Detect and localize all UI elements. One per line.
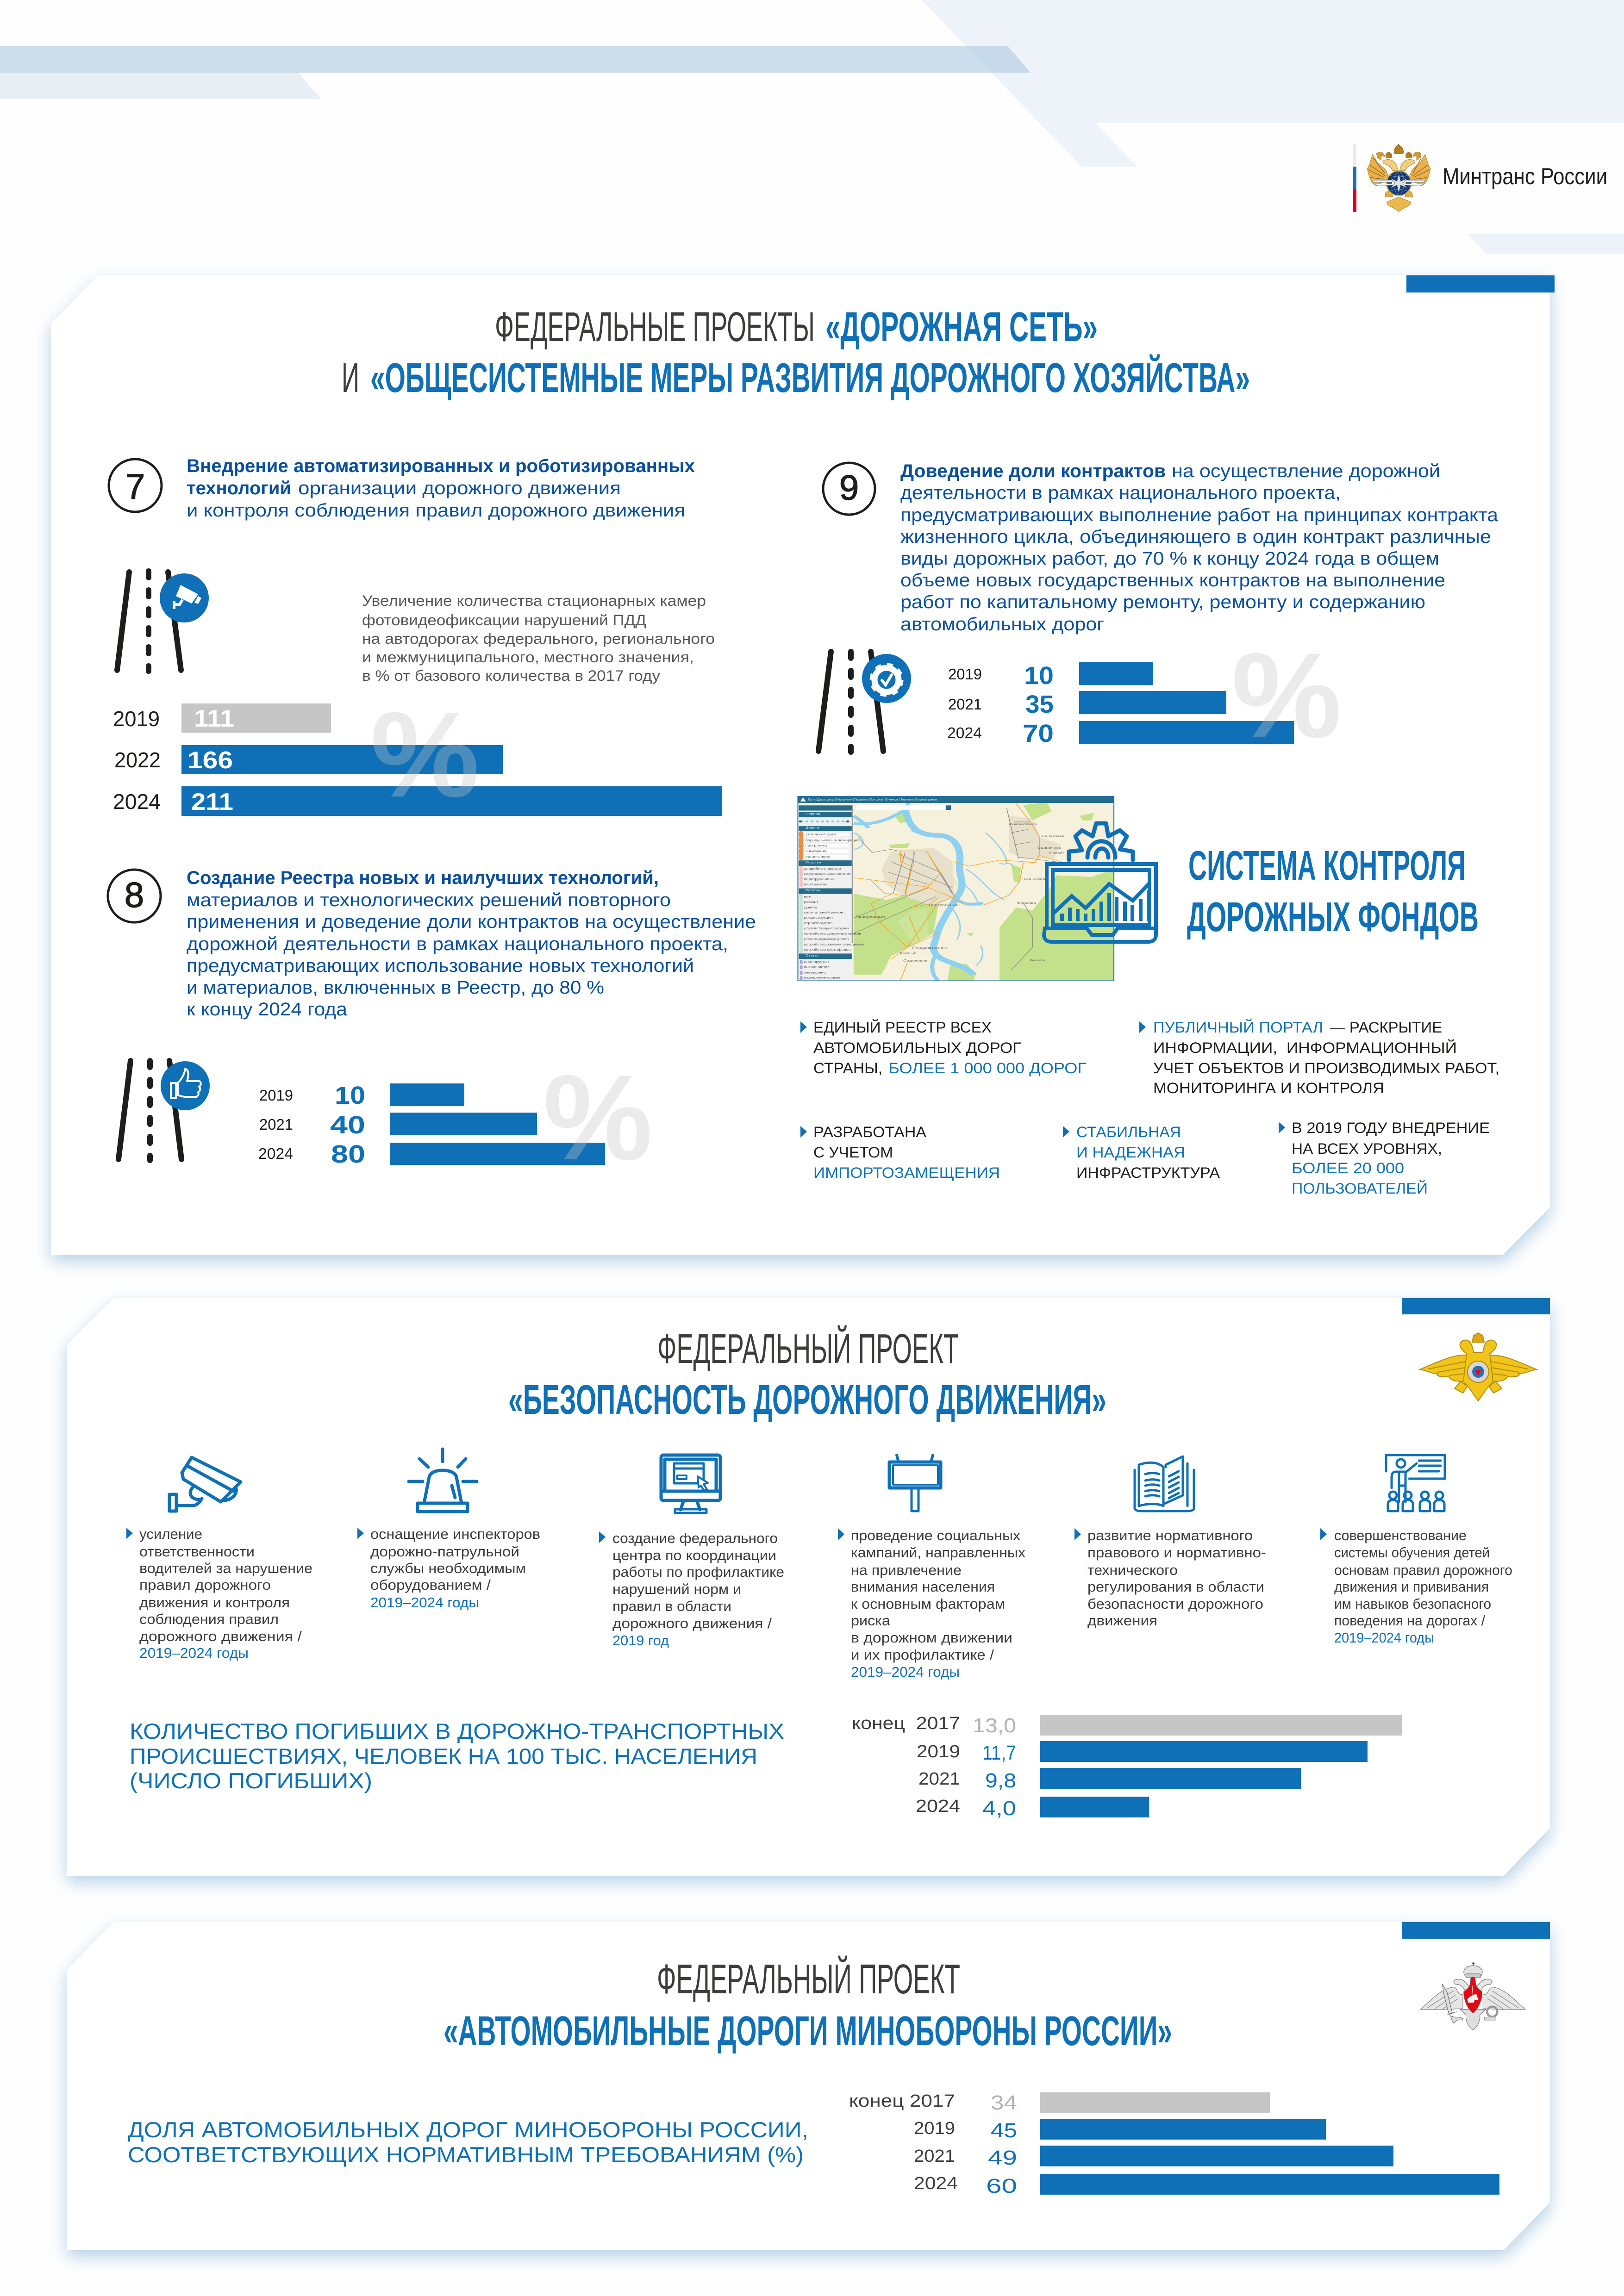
- text block: item 8: дорожной деятельности в рамках национального проекта,: [187, 934, 728, 954]
- text block: item 9: предусматривающих выполнение работ на принципах контракта: [900, 505, 1499, 525]
- item: социальные кампании: 2019–2024 годы: [851, 1664, 960, 1680]
- heading: минобороны: [443, 1955, 1172, 2054]
- number badge 9: [823, 463, 875, 515]
- bullet: импортозамещение: [800, 1124, 1000, 1181]
- item: обучение детей: основам правил дорожного: [1334, 1562, 1512, 1578]
- bar chart: item 8: 2019: [259, 1087, 293, 1104]
- map screenshot: все: [804, 895, 811, 898]
- bullet: 20 000 пользователей: БОЛЕЕ 20 000: [1292, 1160, 1404, 1176]
- item: оснащение инспекторов: оснащение инспекторов: [370, 1526, 540, 1542]
- item: усиление ответственности: усиление: [139, 1526, 202, 1542]
- map screenshot: аварийно-опасные: [804, 867, 841, 870]
- text block: item 9: работ по капитальному ремонту, ремонту и содержанию: [900, 592, 1425, 612]
- heading: дорожная сеть: ФЕДЕРАЛЬНЫЕ ПРОЕКТЫ: [495, 304, 815, 350]
- map screenshot: барнаульская агломерация: [806, 839, 860, 842]
- heading: минобороны: «АВТОМОБИЛЬНЫЕ ДОРОГИ МИНОБОРОНЫ РОССИИ»: [443, 2008, 1172, 2054]
- item: обучение детей: совершенствование: [1334, 1527, 1467, 1543]
- bullet: 20 000 пользователей: [1279, 1120, 1490, 1197]
- panel: дорожная сеть: [51, 275, 1555, 1261]
- item: обучение детей: поведения на дорогах /: [1334, 1612, 1485, 1629]
- map screenshot: строительство: [804, 921, 833, 925]
- item: усиление ответственности: движения и контроля: [139, 1594, 290, 1611]
- item: социальные кампании: внимания населения: [851, 1579, 995, 1595]
- bullet: импортозамещение: РАЗРАБОТАНА: [813, 1124, 927, 1140]
- bar chart: item 9: 2021: [948, 696, 982, 713]
- item: оснащение инспекторов: 2019–2024 годы: [370, 1594, 479, 1611]
- number badge 9: 9: [839, 468, 859, 508]
- panel: автомобильные дороги минобороны: [67, 1922, 1550, 2257]
- map screenshot: 2 выбрано: [806, 850, 826, 853]
- icon: siren: [409, 1449, 477, 1512]
- item: социальные кампании: риска: [851, 1612, 891, 1629]
- icon: road with gear: [818, 652, 911, 752]
- item: нормативное регулирование: развитие нормативного: [1087, 1527, 1253, 1543]
- item: оснащение инспекторов: оборудованием /: [370, 1577, 491, 1593]
- bar chart: доля дорог: 45: [991, 2119, 1017, 2142]
- bullet: 20 000 пользователей: НА ВСЕХ УРОВНЯХ,: [1292, 1140, 1442, 1157]
- item: обучение детей: движения и прививания: [1334, 1579, 1489, 1595]
- bullet: импортозамещение: ИМПОРТОЗАМЕЩЕНИЯ: [813, 1164, 1000, 1181]
- text block: camera description: [362, 592, 715, 684]
- map screenshot: Южный: [900, 951, 917, 955]
- map screenshot: планируется: [804, 960, 829, 964]
- item: усиление ответственности: соблюдения правил: [139, 1611, 279, 1627]
- bar chart: погибшие: конец 2017: [852, 1714, 960, 1733]
- bar chart: item 9: 10: [1024, 662, 1054, 690]
- item: федеральный центр: нарушений норм и: [612, 1581, 741, 1597]
- map screenshot: алтайский край: [806, 833, 836, 836]
- panel: безопасность дорожного движения: [67, 1298, 1550, 1882]
- text block: item 9: на осуществление дорожной: [1172, 461, 1440, 481]
- bar chart: погибшие: 11,7: [982, 1742, 1016, 1764]
- bullet: единый реестр: [800, 1019, 1087, 1076]
- item: усиление ответственности: дорожного движения /: [139, 1628, 302, 1644]
- bullet: публичный портал: ПУБЛИЧНЫЙ ПОРТАЛ: [1153, 1019, 1323, 1036]
- map screenshot: организация: [806, 855, 830, 859]
- item: усиление ответственности: водителей за нарушение: [139, 1560, 312, 1576]
- text block: доля дорог: СООТВЕТСТВУЮЩИХ НОРМАТИВНЫМ ТРЕБОВАНИЯМ (%): [128, 2142, 804, 2167]
- bar chart: погибшие: 2021: [918, 1769, 960, 1789]
- item: обучение детей: системы обучения детей: [1334, 1544, 1490, 1561]
- item: оснащение инспекторов: дорожно-патрульной: [370, 1543, 519, 1560]
- bar chart: погибшие: 9,8: [985, 1769, 1016, 1792]
- bar chart: item 9: %: [1231, 628, 1342, 763]
- bar chart: item 9: 35: [1025, 691, 1054, 718]
- bar chart: доля дорог: 2024: [914, 2174, 958, 2193]
- icon: monitor: [661, 1455, 720, 1513]
- bullet: 20 000 пользователей: В 2019 ГОДУ ВНЕДРЕНИЕ: [1292, 1120, 1490, 1136]
- bullet: 20 000 пользователей: ПОЛЬЗОВАТЕЛЕЙ: [1292, 1180, 1428, 1197]
- number badge 7: [109, 459, 162, 512]
- text block: item 7: [187, 456, 695, 521]
- text block: количество погибших: ПРОИСШЕСТВИЯХ, ЧЕЛОВЕК НА 100 ТЫС. НАСЕЛЕНИЯ: [130, 1744, 757, 1768]
- item: социальные кампании: и их профилактике /: [851, 1647, 994, 1663]
- bar chart: доля дорог: 49: [988, 2147, 1017, 2169]
- bar chart: item 8: 80: [331, 1140, 365, 1168]
- icon: open book: [1135, 1456, 1194, 1511]
- bullet: единый реестр: ЕДИНЫЙ РЕЕСТР ВСЕХ: [813, 1019, 992, 1036]
- item: обучение детей: им навыков безопасного: [1334, 1596, 1491, 1612]
- item: усиление ответственности: правил дорожного: [139, 1577, 271, 1593]
- heading: безопасность: [508, 1325, 1106, 1423]
- bar chart: item 8: [258, 1050, 653, 1185]
- map screenshot: ремонт: [804, 900, 818, 903]
- bar chart: item 8: %: [543, 1050, 653, 1185]
- bar chart: доля дорог: [849, 2091, 1499, 2197]
- bullet: единый реестр: СТРАНЫ,: [813, 1060, 882, 1076]
- map screenshot: Новый: [1049, 851, 1064, 854]
- text block: item 9: автомобильных дорог: [900, 614, 1104, 635]
- text block: количество погибших: [130, 1719, 784, 1793]
- item: нормативное регулирование: регулирования в области: [1087, 1579, 1264, 1595]
- item: социальные кампании: [838, 1455, 1026, 1680]
- bullet: публичный портал: ИНФОРМАЦИИ, ИНФОРМАЦИОННЫЙ: [1153, 1039, 1457, 1056]
- item: федеральный центр: 2019 год: [612, 1632, 669, 1649]
- bar chart: item 7: 2022: [114, 748, 161, 772]
- map screenshot: Участки: [806, 861, 821, 864]
- text block: item 9: жизненного цикла, объединяющего в один контракт различные: [900, 527, 1491, 547]
- item: федеральный центр: [599, 1455, 784, 1649]
- item: федеральный центр: правил в области: [612, 1598, 731, 1614]
- item: нормативное регулирование: движения: [1087, 1612, 1157, 1629]
- bar chart: item 7: %: [370, 687, 480, 822]
- icon: surveillance camera: [169, 1457, 241, 1511]
- text block: item 8: к концу 2024 года: [187, 999, 348, 1020]
- text block: camera description: Увеличение количества стационарных камер: [362, 592, 706, 609]
- number badge 7: 7: [125, 467, 145, 506]
- map screenshot: капитальный ремонт: [804, 911, 845, 914]
- item: федеральный центр: дорожного движения /: [612, 1615, 772, 1631]
- item: усиление ответственности: [126, 1457, 312, 1661]
- bullet: публичный портал: УЧЕТ ОБЪЕКТОВ И ПРОИЗВОДИМЫХ РАБОТ,: [1153, 1060, 1499, 1076]
- bar chart: погибшие: 2019: [917, 1742, 960, 1761]
- number badge 8: [108, 870, 161, 922]
- map screenshot: Пригородный: [856, 915, 885, 919]
- map screenshot: другое: [804, 906, 817, 909]
- text block: camera description: на автодорогах федерального, регионального: [362, 630, 715, 647]
- map screenshot: реконструкция: [804, 916, 833, 920]
- map screenshot: завершено: [804, 971, 826, 974]
- bar chart: доля дорог: конец 2017: [849, 2091, 955, 2111]
- icon: billboard: [889, 1455, 941, 1511]
- heading: дорожная сеть: [342, 304, 1250, 401]
- bullet: стабильная инфраструктура: СТАБИЛЬНАЯ: [1076, 1124, 1181, 1140]
- text block: item 7: организации дорожного движения: [298, 478, 621, 498]
- text block: item 8: предусматривающих использование новых технологий: [187, 956, 694, 976]
- text block: item 8: и материалов, включенных в Реестр, до 80 %: [187, 977, 604, 998]
- text block: доля дорог: ДОЛЯ АВТОМОБИЛЬНЫХ ДОРОГ МИНОБОРОНЫ РОССИИ,: [128, 2117, 808, 2142]
- map screenshot: Работы: [806, 889, 820, 892]
- bar chart: погибшие: 2024: [916, 1797, 960, 1816]
- text block: item 8: материалов и технологических решений повторного: [187, 890, 671, 910]
- item: обучение детей: [1320, 1455, 1512, 1646]
- item: нормативное регулирование: [1074, 1456, 1266, 1629]
- heading: дорожная сеть: «ДОРОЖНАЯ СЕТЬ»: [825, 304, 1098, 350]
- item: нормативное регулирование: безопасности дорожного: [1087, 1596, 1263, 1612]
- bullet: стабильная инфраструктура: [1063, 1124, 1220, 1181]
- text block: item 8: Создание Реестра новых и наилучших технологий,: [187, 868, 659, 888]
- bar chart: item 9: [947, 628, 1342, 763]
- text block: item 9: виды дорожных работ, до 70 % к концу 2024 года в общем: [900, 548, 1439, 569]
- bar chart: item 8: 10: [335, 1082, 365, 1109]
- map screenshot: Дороги: [806, 826, 819, 829]
- bar chart: item 9: 70: [1023, 720, 1054, 747]
- text block: item 8: применения и доведение доли контрактов на осуществление: [187, 912, 756, 932]
- bar chart: item 8: 2024: [258, 1145, 293, 1162]
- heading: минобороны: ФЕДЕРАЛЬНЫЙ ПРОЕКТ: [657, 1955, 960, 2003]
- text block: item 7: Внедрение автоматизированных и роботизированных: [187, 456, 695, 476]
- item: нормативное регулирование: правового и нормативно-: [1087, 1544, 1266, 1561]
- item: обучение детей: 2019–2024 годы: [1334, 1630, 1434, 1646]
- text block: item 7: и контроля соблюдения правил дорожного движения: [187, 500, 685, 521]
- bullet: стабильная инфраструктура: И НАДЕЖНАЯ: [1076, 1144, 1185, 1161]
- item: оснащение инспекторов: службы необходимым: [370, 1560, 526, 1576]
- map screenshot: Карта | Дороги, улицы | Мероприятия | Программы | Контракты | Отчетность | Аналитика | Открытые данные: [808, 798, 937, 801]
- map screenshot: устройство светофоров: [804, 948, 851, 951]
- map screenshot: устройство направляющих устройств: [804, 938, 849, 941]
- bullet: публичный портал: [1139, 1019, 1499, 1096]
- map screenshot: Фирсово: [1017, 901, 1036, 904]
- map screenshot: устройство барьерного ограждения: [804, 927, 849, 930]
- bullet: публичный портал: — РАСКРЫТИЕ: [1330, 1019, 1442, 1036]
- text block: camera description: и межмуниципального, местного значения,: [362, 649, 694, 666]
- icon: laptop with gear and chart: [1044, 823, 1156, 942]
- item: усиление ответственности: ответственности: [139, 1543, 255, 1560]
- bar chart: item 9: 2019: [948, 666, 982, 683]
- map screenshot: Статус: [806, 954, 819, 957]
- icon: road with camera: [117, 571, 209, 671]
- map screenshot: Центральный: [929, 903, 959, 907]
- text block: item 8: [187, 868, 756, 1020]
- map screenshot: Лесной: [1029, 958, 1045, 962]
- map screenshot: в неудовлетворительном состоянии: [804, 872, 850, 876]
- map screenshot: перегруженные: [804, 877, 835, 881]
- text block: item 7: технологий: [187, 478, 291, 498]
- bar chart: item 7: 2019: [113, 707, 160, 731]
- map screenshot: Садоводов: [903, 958, 928, 962]
- item: федеральный центр: создание федерального: [612, 1530, 778, 1546]
- text block: camera description: в % от базового количества в 2017 году: [362, 667, 660, 684]
- text block: item 9: [900, 461, 1499, 635]
- icon: Ministry of Defence emblem: [1420, 1962, 1525, 2030]
- text block: item 9: объеме новых государственных контрактов на выполнение: [900, 570, 1445, 591]
- item: социальные кампании: в дорожном движении: [851, 1630, 1012, 1646]
- icon: road with thumbs up: [119, 1061, 210, 1160]
- heading: дорожная сеть: И: [342, 355, 359, 401]
- item: социальные кампании: кампаний, направленных: [851, 1544, 1026, 1561]
- bar chart: погибшие: 4,0: [982, 1797, 1016, 1820]
- map screenshot: устройство замена освещения: [804, 943, 864, 946]
- text block: количество погибших: (ЧИСЛО ПОГИБШИХ): [130, 1768, 372, 1793]
- item: оснащение инспекторов: [357, 1449, 540, 1611]
- bar chart: погибшие: 13,0: [973, 1714, 1016, 1737]
- bar chart: item 7: 211: [191, 789, 233, 815]
- bar chart: доля дорог: 2019: [914, 2119, 955, 2138]
- map screenshot: Солнечное: [1037, 846, 1062, 850]
- item: усиление ответственности: 2019–2024 годы: [139, 1645, 249, 1661]
- heading: система контроля: [1187, 843, 1479, 940]
- number badge 8: 8: [125, 876, 144, 915]
- map screenshot: программа: [806, 844, 827, 847]
- map screenshot: [798, 796, 1114, 981]
- map screenshot: выполняется: [804, 965, 830, 969]
- item: федеральный центр: центра по координации: [612, 1547, 776, 1563]
- bullet: импортозамещение: С УЧЕТОМ: [813, 1144, 893, 1161]
- bar chart: item 7: 166: [187, 747, 233, 774]
- heading: безопасность: «БЕЗОПАСНОСТЬ ДОРОЖНОГО ДВИЖЕНИЯ»: [508, 1377, 1106, 1423]
- icon: Mintrans emblem: [1367, 144, 1430, 212]
- text block: количество погибших: КОЛИЧЕСТВО ПОГИБШИХ В ДОРОЖНО-ТРАНСПОРТНЫХ: [130, 1719, 784, 1743]
- bullet: публичный портал: МОНИТОРИНГА И КОНТРОЛЯ: [1153, 1080, 1384, 1096]
- heading: безопасность: ФЕДЕРАЛЬНЫЙ ПРОЕКТ: [657, 1325, 959, 1372]
- bar chart: доля дорог: 60: [986, 2175, 1017, 2197]
- item: социальные кампании: на привлечение: [851, 1562, 962, 1578]
- bar chart: погибшие: [852, 1714, 1402, 1820]
- bar chart: item 7: 111: [194, 705, 234, 732]
- logo: Минтранс России: [1353, 144, 1607, 212]
- text block: item 9: деятельности в рамках национального проекта,: [900, 483, 1341, 503]
- item: социальные кампании: к основным факторам: [851, 1596, 1005, 1612]
- icon: teacher and students: [1386, 1455, 1445, 1511]
- item: нормативное регулирование: технического: [1087, 1562, 1178, 1578]
- map screenshot: Новоалтайск: [1009, 822, 1037, 826]
- map screenshot: устройство дорожных знаков: [804, 932, 861, 935]
- text block: item 9: Доведение доли контрактов: [900, 461, 1166, 481]
- bar chart: доля дорог: 2021: [914, 2147, 955, 2166]
- map screenshot: Березовка: [1042, 834, 1065, 838]
- text block: доля дорог: [128, 2117, 808, 2167]
- bar chart: item 9: 2024: [947, 724, 982, 741]
- bullet: единый реестр: АВТОМОБИЛЬНЫХ ДОРОГ: [813, 1039, 1021, 1056]
- map screenshot: Период: [806, 812, 821, 815]
- bullet: стабильная инфраструктура: ИНФРАСТРУКТУРА: [1076, 1164, 1220, 1181]
- map screenshot: Санниково: [1024, 877, 1048, 881]
- icon: MVD emblem: [1420, 1333, 1537, 1401]
- bar chart: item 8: 40: [330, 1111, 365, 1139]
- item: федеральный центр: работы по профилактике: [612, 1564, 784, 1580]
- bar chart: доля дорог: 34: [991, 2091, 1017, 2114]
- bar chart: item 8: 2021: [259, 1116, 293, 1133]
- bullet: единый реестр: БОЛЕЕ 1 000 000 ДОРОГ: [888, 1060, 1087, 1076]
- map screenshot: нарушение сроков: [804, 976, 841, 979]
- bar chart: item 7: 2024: [113, 790, 161, 814]
- text block: camera description: фотовидеофиксации нарушений ПДД: [362, 612, 646, 628]
- map screenshot: на гарантии: [804, 883, 827, 886]
- bar chart: item 7: [113, 687, 722, 822]
- map screenshot: Плодопитомник: [912, 946, 947, 949]
- item: социальные кампании: проведение социальных: [851, 1527, 1021, 1543]
